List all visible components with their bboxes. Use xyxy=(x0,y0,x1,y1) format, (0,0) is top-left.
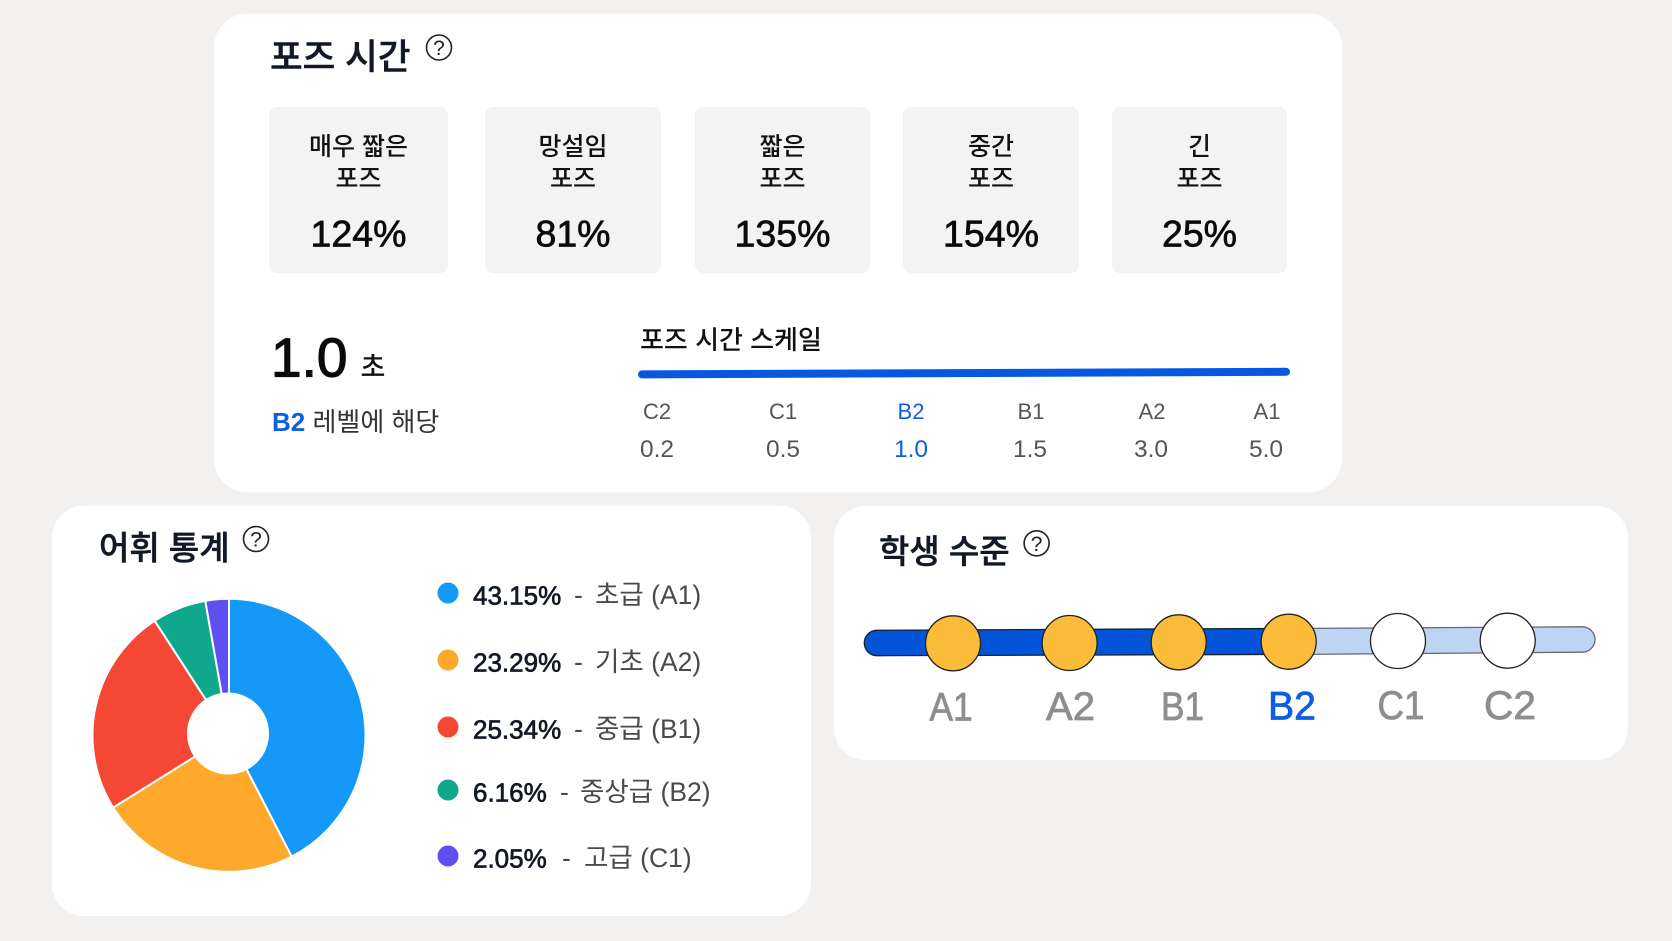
legend item: C1: 고급 (C1) xyxy=(584,843,692,873)
card: long pause xyxy=(1112,107,1287,273)
scale labels: 3.0 xyxy=(1134,436,1168,463)
legend item: A2 xyxy=(438,647,701,678)
scale labels: B2 xyxy=(898,399,924,424)
legend item: C1 xyxy=(438,843,692,874)
card: short pause: 짧은 xyxy=(759,133,806,161)
scale labels xyxy=(640,399,1283,463)
legend item: A1: 초급 (A1) xyxy=(595,580,701,610)
legend item: A2: 23.29% xyxy=(473,648,561,678)
icon: help: ? xyxy=(433,37,445,60)
card: long pause: 25% xyxy=(1162,212,1237,254)
legend item: B1: 중급 (B1) xyxy=(595,714,701,744)
panel: pause time xyxy=(214,14,1342,492)
legend item: B1: 25.34% xyxy=(473,714,561,744)
legend item: A1: - xyxy=(574,580,583,610)
legend item: A2: 기초 (A2) xyxy=(595,647,701,677)
card: short pause: 포즈 xyxy=(759,165,806,193)
legend xyxy=(438,580,711,874)
card: medium pause xyxy=(903,107,1079,273)
level labels: A2 xyxy=(1046,685,1095,729)
icon: help xyxy=(1024,531,1049,556)
legend item: C1: - xyxy=(562,843,571,873)
legend item: A1: 43.15% xyxy=(473,580,561,610)
legend item: B1: - xyxy=(574,714,583,744)
card: short pause xyxy=(695,107,870,273)
icon: help: ? xyxy=(250,528,262,552)
level markers xyxy=(926,613,1535,671)
level track xyxy=(864,627,1595,656)
scale labels: A1 xyxy=(1254,399,1280,424)
card: stutter pause xyxy=(485,107,661,273)
level labels: A1 xyxy=(930,686,972,730)
legend item: A2: - xyxy=(574,647,583,677)
scale labels: 1.0 xyxy=(894,436,928,463)
panel: vocabulary stats xyxy=(52,506,811,916)
icon: help: ? xyxy=(1031,533,1042,556)
card: stutter pause: 81% xyxy=(535,212,611,254)
card: very short pause: 포즈 xyxy=(335,165,382,193)
card: medium pause: 포즈 xyxy=(968,165,1014,193)
card: short pause: 135% xyxy=(735,212,830,254)
icon: help xyxy=(426,35,452,60)
card: medium pause: 154% xyxy=(943,212,1039,254)
scale labels: 1.5 xyxy=(1013,436,1047,463)
heading: pause scale: 포즈 시간 스케일 xyxy=(640,325,822,355)
legend item: C1: 2.05% xyxy=(473,844,547,874)
card: stutter pause: 포즈 xyxy=(550,165,596,193)
card: stutter pause: 망설임 xyxy=(538,133,608,161)
scale labels: C2 xyxy=(643,399,671,424)
level labels: B1 xyxy=(1161,685,1204,729)
heading: vocabulary stats: 어휘 통계 xyxy=(99,530,230,566)
card: medium pause: 중간 xyxy=(968,133,1014,161)
donut chart xyxy=(92,599,366,872)
legend item: B2: - xyxy=(560,777,569,807)
scale labels: 0.2 xyxy=(640,436,674,463)
legend item: A1 xyxy=(438,580,701,610)
big value: 1.0 seconds xyxy=(271,326,385,388)
panel: student level xyxy=(834,506,1628,760)
level labels xyxy=(930,684,1536,730)
card: very short pause xyxy=(269,107,448,273)
big value: 1.0 seconds: 1.0 xyxy=(271,326,347,388)
card: long pause: 긴 xyxy=(1188,133,1211,161)
scale bar xyxy=(642,372,1286,374)
heading: student level: 학생 수준 xyxy=(879,533,1010,570)
card: very short pause: 124% xyxy=(311,212,406,254)
level labels: C2 xyxy=(1484,684,1536,728)
scale labels: 0.5 xyxy=(766,436,800,463)
legend item: B2: 중상급 (B2) xyxy=(580,777,711,807)
heading: pause time: 포즈 시간 xyxy=(270,37,411,77)
legend item: B2: 6.16% xyxy=(473,778,547,808)
level labels: B2 xyxy=(1268,684,1316,728)
scale labels: A2 xyxy=(1139,399,1165,424)
big value: 1.0 seconds: 초 xyxy=(360,352,385,382)
icon: help xyxy=(244,526,268,552)
text: level note: B2 레벨에 해당 xyxy=(272,407,439,437)
card: long pause: 포즈 xyxy=(1176,165,1223,193)
scale labels: 5.0 xyxy=(1249,436,1283,463)
scale labels: C1 xyxy=(769,399,797,424)
scale labels: B1 xyxy=(1018,399,1044,424)
legend item: B1 xyxy=(438,714,701,744)
card: very short pause: 매우 짧은 xyxy=(309,133,408,161)
level labels: C1 xyxy=(1378,684,1424,728)
legend item: B2 xyxy=(438,777,711,808)
